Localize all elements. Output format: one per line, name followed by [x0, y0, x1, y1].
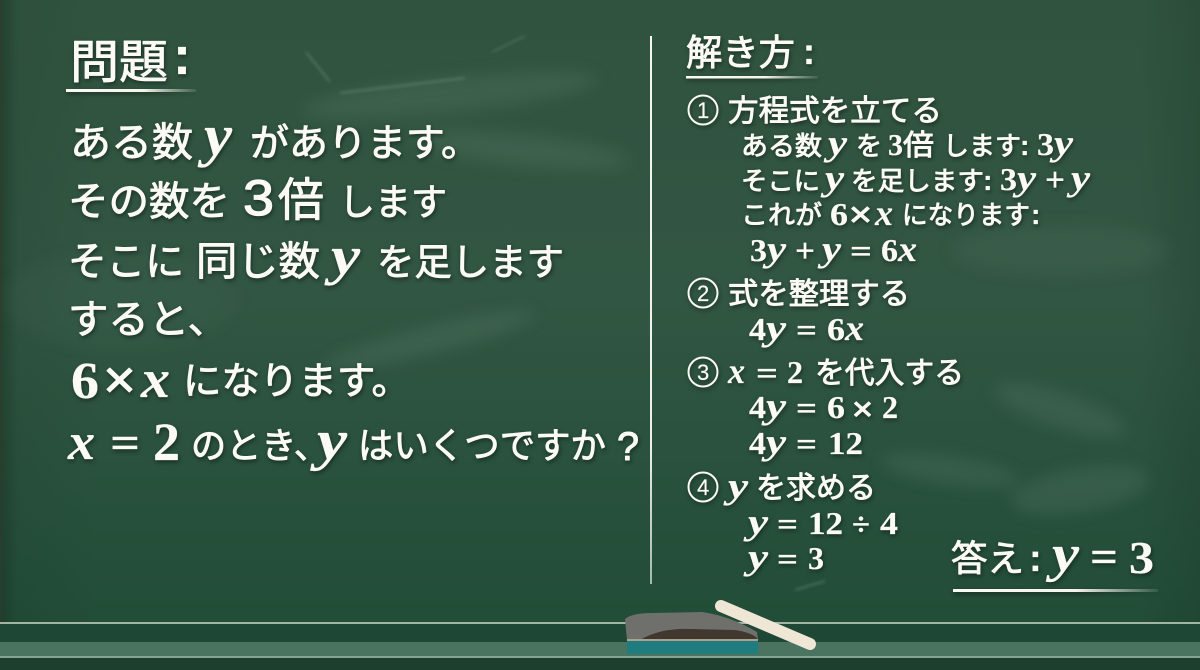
step 4 title — [688, 466, 876, 506]
step 3 line b: y — [761, 422, 787, 462]
step 1 line b — [741, 158, 1091, 199]
step 1 title: 1 — [697, 98, 709, 123]
problem line 2: します — [339, 182, 447, 223]
problem line 2: 倍 — [278, 174, 324, 226]
step 3 line a: 2 — [882, 389, 898, 425]
step 3 title: 3 — [697, 360, 709, 385]
step 1 equation: 6 — [881, 232, 898, 268]
answer text — [951, 526, 1154, 583]
problem line 6: はいくつですか — [358, 425, 606, 466]
problem line 5: になります。 — [183, 361, 410, 403]
step 1 line c: 6 — [830, 196, 848, 232]
step 1 line a — [741, 123, 1074, 163]
problem line 2: 3 — [243, 170, 274, 226]
problem line 3: 同じ数 — [196, 240, 320, 284]
step 1 line a: します — [943, 131, 1021, 161]
problem line 1: y — [197, 103, 232, 168]
step 1 equation: = — [850, 233, 872, 269]
step 1 line a: 倍 — [903, 129, 934, 162]
step 1 line c: × — [849, 196, 872, 234]
step 1 line c — [741, 193, 1040, 234]
answer text: y — [1045, 526, 1080, 583]
problem line 6 — [67, 410, 639, 472]
step 1 equation — [750, 229, 917, 270]
panel: solution — [686, 31, 1091, 577]
step 2 equation: 6 — [827, 311, 845, 347]
answer text: 3 — [1129, 532, 1154, 583]
step 1 line b: を足します — [851, 166, 984, 196]
problem line 5: x — [140, 349, 170, 409]
problem line 6: 2 — [153, 412, 180, 472]
step 3 line a: = — [796, 390, 817, 426]
step 2 equation: = — [796, 312, 817, 348]
problem line 6: y — [310, 410, 348, 472]
problem line 3: を足します — [377, 242, 564, 283]
step 3 title: = — [756, 355, 778, 391]
answer text: = — [1090, 531, 1118, 582]
step 3 line b: 4 — [749, 425, 766, 461]
step 1 equation: y — [762, 229, 787, 269]
step 2 title: 2 — [697, 281, 709, 306]
heading: problem: : — [173, 26, 191, 86]
step 1 line b: そこに — [741, 166, 820, 196]
problem line 1: ある数 — [70, 121, 193, 165]
step 1 equation: x — [897, 229, 917, 269]
step 1 line b: 3 — [1000, 161, 1017, 197]
step 4 title: を求める — [756, 472, 876, 505]
step 3 line a: 4 — [749, 389, 766, 425]
eraser — [625, 612, 758, 654]
step 4 line a: = — [777, 506, 798, 542]
step 4 line a: y — [743, 502, 769, 542]
problem line 5: × — [103, 350, 136, 410]
chalk stick — [721, 606, 810, 644]
problem line 3 — [68, 226, 564, 286]
step 4 title: 4 — [697, 475, 709, 500]
heading underline — [686, 76, 818, 78]
step 1 line a: を — [856, 131, 882, 161]
step 3 line a: 6 — [827, 389, 845, 425]
step 1 line a: ある数 — [741, 131, 822, 161]
step 2 equation: x — [844, 308, 864, 348]
step 3 line a: y — [761, 386, 787, 426]
answer text: 答え — [951, 538, 1024, 579]
step 1 equation: 3 — [750, 232, 767, 268]
step 4 title: y — [723, 466, 749, 506]
answer text: : — [1029, 538, 1042, 580]
step 2 equation: 4 — [749, 311, 766, 347]
step 4 line a: 4 — [880, 505, 898, 541]
problem line 2 — [68, 170, 447, 226]
step 4 line b: 3 — [808, 540, 824, 576]
heading: solution: 解き方 — [686, 32, 795, 73]
step 1 line b: y — [820, 158, 845, 198]
problem line 6: x — [67, 414, 95, 471]
step 3 line a — [749, 386, 898, 427]
step 1 title: 方程式を立てる — [728, 95, 942, 128]
step 2 title: 式を整理する — [728, 278, 910, 311]
heading underline — [66, 89, 196, 92]
step 1 line a: y — [1049, 123, 1074, 163]
step 3 line b: = — [796, 426, 817, 462]
step 1 line c: : — [1031, 199, 1040, 230]
problem line 4: すると、 — [68, 298, 228, 342]
step 1 line b: y — [1066, 158, 1091, 198]
step 1 line b: + — [1045, 162, 1065, 199]
answer — [951, 526, 1158, 592]
step 1 line a: 3 — [888, 127, 903, 162]
step 3 line b — [749, 422, 863, 462]
answer underline — [953, 589, 1158, 592]
heading: problem: 問題 — [70, 36, 168, 88]
step 4 line b: = — [777, 541, 798, 577]
step 4 line a: 12 — [808, 505, 843, 541]
heading: problem — [70, 26, 191, 88]
step 4 line a — [743, 502, 898, 542]
problem line 6: = — [110, 417, 140, 468]
step 4 line b: y — [743, 537, 769, 577]
problem line 6: ? — [617, 425, 639, 469]
step 1 line a: y — [823, 123, 848, 163]
panel: problem — [66, 26, 639, 472]
step 3 title — [688, 351, 964, 391]
heading: solution: : — [803, 31, 815, 72]
step 1 line c: x — [874, 193, 893, 233]
step 1 equation: y — [817, 229, 842, 269]
step 3 line b: 12 — [828, 425, 863, 461]
problem line 6: のとき、 — [191, 425, 329, 466]
problem line 5: 6 — [71, 353, 99, 410]
step 1 line c: これが — [741, 200, 822, 230]
step 1 line a: 3 — [1037, 126, 1054, 162]
problem line 1 — [70, 103, 480, 168]
step 1 line a: : — [1020, 130, 1029, 161]
problem line 5 — [71, 349, 410, 410]
step 1 line c: になります — [902, 200, 1030, 230]
step 3 title: x — [727, 351, 745, 391]
problem line 3: y — [324, 226, 361, 286]
problem line 2: その数を — [68, 180, 230, 224]
step 4 line a: ÷ — [852, 506, 870, 542]
step 2 equation — [749, 308, 864, 348]
step 3 line a: × — [852, 391, 873, 427]
step 4 line b — [743, 537, 824, 577]
step 1 line b: y — [1012, 158, 1037, 198]
step 1 equation: + — [795, 233, 815, 270]
step 3 title: 2 — [787, 354, 803, 390]
problem line 3: そこに — [68, 240, 184, 284]
problem line 1: があります。 — [250, 123, 480, 165]
step 2 equation: y — [761, 308, 787, 348]
step 1 line b: : — [983, 165, 992, 196]
center divider — [650, 36, 652, 584]
step 3 title: を代入する — [815, 357, 964, 390]
